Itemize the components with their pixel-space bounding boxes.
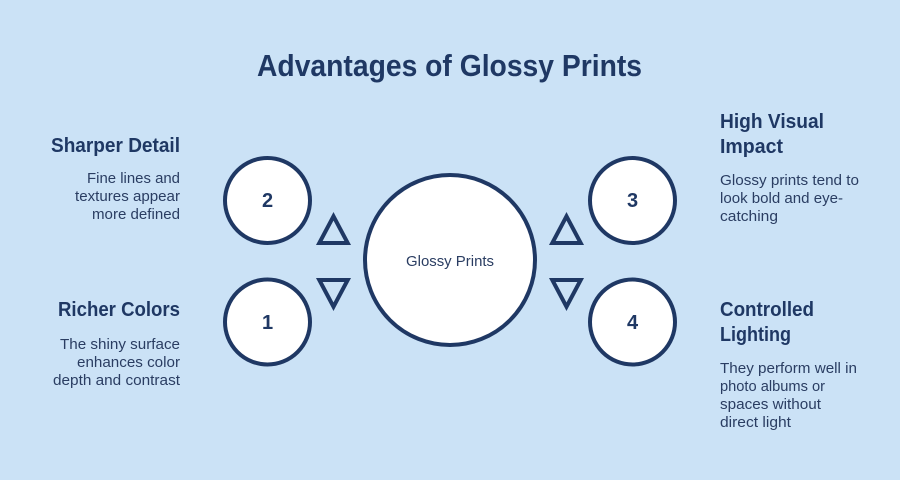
text block: High Visual Impact description: look bold and eye-	[720, 190, 843, 207]
central circle: Glossy Prints	[365, 175, 535, 345]
text block: Controlled Lighting description: photo albums or	[720, 378, 825, 395]
heading: High Visual Impact: Impact	[720, 136, 783, 158]
arrow: right up triangle	[552, 216, 581, 243]
panel: Richer Colors	[53, 299, 181, 389]
circle 2	[225, 158, 310, 243]
text block: High Visual Impact description: Glossy prints tend to	[720, 172, 859, 189]
text block: Sharper Detail description: textures appear	[75, 188, 180, 205]
panel: High Visual Impact	[720, 111, 859, 225]
circle 3: 3	[627, 190, 638, 212]
heading: High Visual Impact	[720, 111, 824, 158]
text block: Richer Colors description: The shiny surface	[60, 336, 180, 353]
text block: High Visual Impact description: catching	[720, 208, 778, 225]
central circle: Glossy Prints: Glossy Prints	[406, 253, 494, 270]
circle 1: 1	[262, 312, 273, 334]
heading: High Visual Impact: High Visual	[720, 111, 824, 133]
circle 1	[225, 280, 310, 364]
panel: Controlled Lighting	[720, 299, 857, 431]
text block: High Visual Impact description	[720, 172, 859, 225]
arrow: right down triangle	[552, 280, 581, 307]
arrow: left up triangle	[319, 216, 348, 243]
heading: Controlled Lighting: Lighting	[720, 324, 791, 346]
title: Advantages of Glossy Prints	[257, 48, 642, 83]
text block: Controlled Lighting description: spaces without	[720, 396, 822, 413]
arrow: left down triangle	[319, 280, 348, 307]
heading: Richer Colors: Richer Colors	[58, 299, 180, 321]
text block: Richer Colors description: depth and contrast	[53, 372, 181, 389]
text block: Sharper Detail description: Fine lines and	[87, 170, 180, 187]
panel: Sharper Detail	[51, 135, 180, 223]
circle 3	[590, 158, 675, 243]
text block: Controlled Lighting description: direct light	[720, 414, 792, 431]
text block: Sharper Detail description: more defined	[92, 206, 180, 223]
text block: Richer Colors description	[53, 336, 181, 389]
text block: Controlled Lighting description: They perform well in	[720, 360, 857, 377]
text block: Sharper Detail description	[75, 170, 180, 223]
circle 2: 2	[262, 190, 273, 212]
heading: Sharper Detail: Sharper Detail	[51, 135, 180, 157]
text block: Richer Colors description: enhances color	[77, 354, 180, 371]
text block: Controlled Lighting description	[720, 360, 857, 431]
circle 4: 4	[627, 312, 639, 334]
heading: Controlled Lighting	[720, 299, 814, 346]
heading: Controlled Lighting: Controlled	[720, 299, 814, 321]
circle 4	[590, 280, 675, 364]
